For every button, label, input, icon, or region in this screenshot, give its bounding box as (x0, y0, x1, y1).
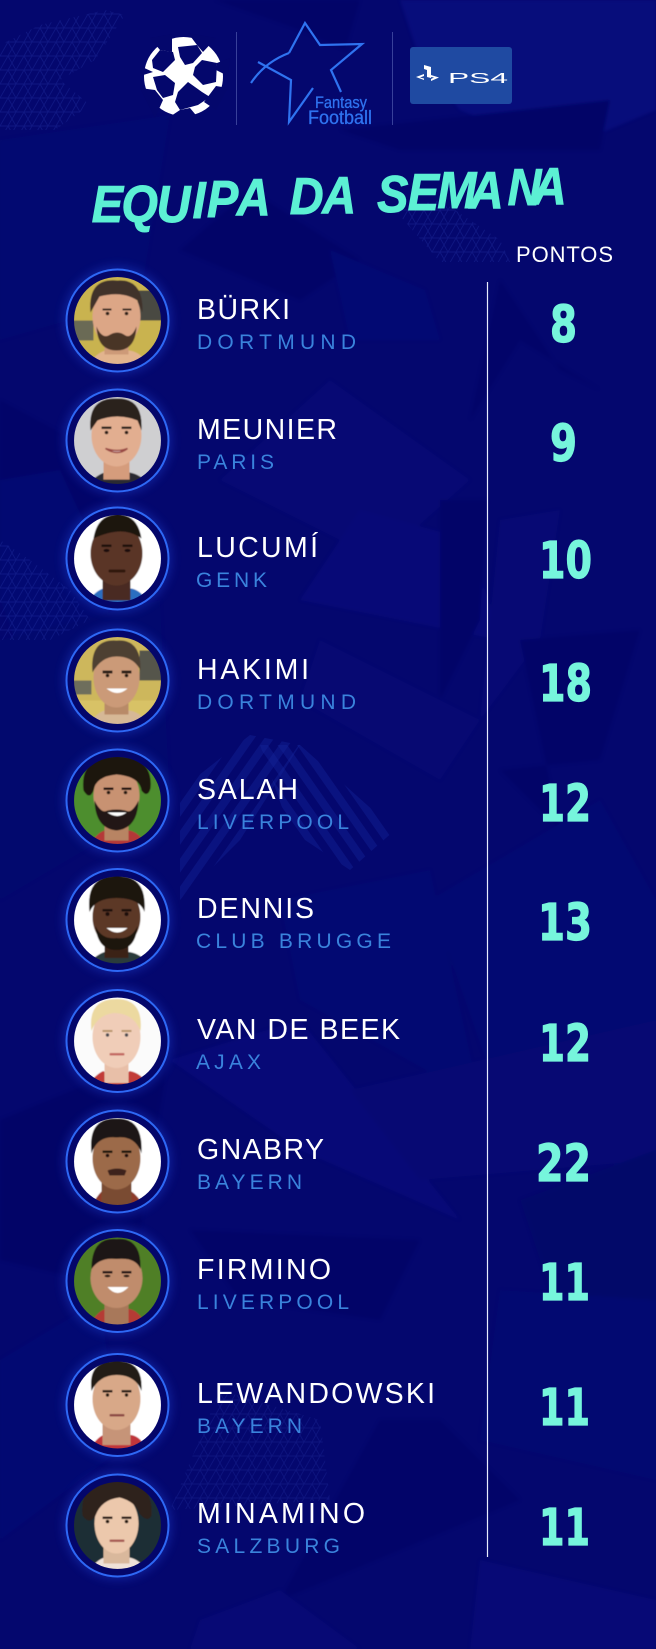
points: 18: 18 (539, 655, 592, 714)
points: 13: 13 (538, 894, 592, 953)
row: Lewandowski (64, 1351, 172, 1459)
club: Liverpool: LIVERPOOL (197, 811, 349, 834)
player name: Van de Beek: VAN DE BEEK (197, 1014, 400, 1046)
club: Bayern: BAYERN (197, 1415, 302, 1438)
photo: Lucumí (74, 514, 162, 602)
player name: Gnabry: GNABRY (197, 1134, 324, 1166)
row: Dennis (64, 866, 172, 974)
points: 22: 22 (536, 1135, 591, 1194)
row: Gnabry (64, 1108, 172, 1216)
player name: Salah: SALAH (197, 774, 298, 806)
points: 10: 10 (539, 532, 592, 591)
divider right (392, 32, 394, 125)
photo: Lewandowski (74, 1361, 162, 1449)
club: Dortmund: DORTMUND (197, 331, 356, 354)
club: Paris: PARIS (197, 451, 274, 474)
logo: Champions League starball (140, 33, 230, 120)
row: Meunier (64, 386, 172, 494)
points: 12: 12 (539, 775, 591, 834)
photo: Firmino (74, 1237, 162, 1325)
column header: pontos: PONTOS (516, 242, 613, 267)
row: Lucumí (64, 504, 172, 612)
photo: Bürki (74, 276, 162, 364)
club: Bayern: BAYERN (197, 1171, 302, 1194)
photo: Van de Beek (74, 997, 162, 1085)
logo: Fantasy Football star (251, 23, 372, 129)
club: Dortmund: DORTMUND (197, 691, 356, 714)
logo: Fantasy Football star: Football (308, 108, 372, 129)
player name: Bürki: BÜRKI (197, 294, 290, 326)
player name: Hakimi: HAKIMI (197, 654, 309, 686)
photo: Minamino (74, 1480, 162, 1570)
club: Genk: GENK (196, 569, 267, 592)
player name: Lucumí: LUCUMÍ (197, 532, 318, 564)
points: 8: 8 (550, 296, 577, 355)
photo: Hakimi (74, 636, 162, 724)
divider: points column (486, 282, 488, 1557)
row: Van de Beek (64, 987, 172, 1095)
photo: Meunier (74, 396, 162, 484)
row: Minamino (64, 1472, 172, 1580)
logo: PS4 badge: PS4 (448, 70, 508, 87)
points: 9: 9 (550, 415, 577, 474)
player name: Meunier: MEUNIER (197, 414, 337, 446)
row: Bürki (64, 266, 172, 374)
club: Ajax: AJAX (196, 1051, 261, 1074)
club: Club Brugge: CLUB BRUGGE (196, 930, 391, 953)
logo: Fantasy Football star: Fantasy (315, 93, 367, 112)
club: Liverpool: LIVERPOOL (197, 1291, 349, 1314)
player name: Minamino: MINAMINO (197, 1498, 365, 1530)
points: 11: 11 (539, 1499, 590, 1558)
points: 12: 12 (539, 1015, 591, 1074)
club: Salzburg: SALZBURG (197, 1535, 340, 1558)
player name: Firmino: FIRMINO (197, 1254, 331, 1286)
points: 11: 11 (539, 1379, 590, 1438)
row: Hakimi (64, 626, 172, 734)
row: Salah (64, 746, 172, 854)
divider left (236, 32, 238, 125)
player name: Dennis: DENNIS (197, 893, 314, 925)
photo: Dennis (74, 876, 162, 964)
row: Firmino (64, 1227, 172, 1335)
title: EQUIPADASEMANA (92, 158, 567, 234)
points: 11: 11 (539, 1254, 590, 1313)
logo: PS4 badge (410, 47, 512, 104)
photo: Gnabry (74, 1118, 162, 1206)
player name: Lewandowski: LEWANDOWSKI (197, 1378, 435, 1410)
photo: Salah (74, 756, 162, 844)
